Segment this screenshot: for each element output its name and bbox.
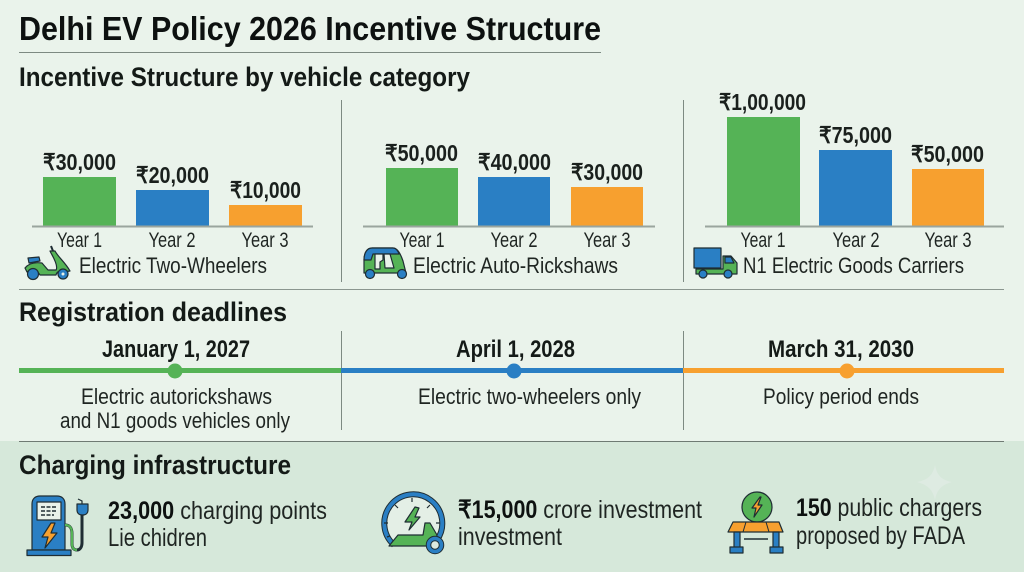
panel: n1 electric goods carriers — [694, 89, 1004, 278]
panel: electric auto-rickshaws — [363, 140, 655, 278]
deadline: january 2027: January 1, 2027 — [102, 336, 250, 363]
bar chart: goods carriers: ₹1,00,000 — [719, 89, 806, 115]
panel: electric two-wheelers — [25, 149, 313, 280]
category label: Electric Two-Wheelers — [79, 253, 267, 278]
bar chart: two-wheelers — [32, 149, 313, 252]
bar chart: goods carriers: Year 3 — [924, 229, 972, 252]
bar chart: two-wheelers: ₹30,000 — [43, 149, 116, 175]
heading: registration deadlines: Registration deadlines — [19, 297, 287, 327]
bar chart: auto-rickshaws: ₹40,000 — [478, 149, 551, 175]
icon: auto-rickshaw — [364, 248, 406, 278]
stat: charging points: Lie chidren — [108, 524, 207, 552]
deadline: april 2028 — [418, 336, 641, 409]
bar chart: goods carriers: Year 1 — [740, 229, 786, 252]
bar chart: auto-rickshaws: Year 2 — [490, 229, 538, 252]
category label: N1 Electric Goods Carriers — [743, 253, 964, 278]
deadline: april 2028: April 1, 2028 — [456, 336, 575, 363]
bar chart: two-wheelers: Year 2 — [148, 229, 196, 252]
stat: charging points — [108, 497, 327, 552]
stat: investment: ₹15,000 crore investment — [458, 496, 702, 524]
stat: investment — [458, 496, 702, 551]
bar chart: auto-rickshaws: Year 1 — [400, 229, 444, 252]
bar chart: two-wheelers: ₹10,000 — [230, 177, 301, 203]
bar chart: goods carriers: ₹75,000 — [819, 122, 892, 148]
stat: charging points: 23,000 charging points — [108, 497, 327, 525]
icon: charging pump — [27, 496, 88, 556]
bar chart: two-wheelers: Year 1 — [57, 229, 102, 252]
deadline: march 2030: Policy period ends — [763, 384, 919, 409]
icon: scooter — [25, 246, 70, 280]
icon: solar charger — [728, 492, 783, 553]
icon: investment gauge — [384, 494, 442, 552]
bar chart: two-wheelers: ₹20,000 — [136, 162, 209, 188]
bar chart: goods carriers: Year 2 — [832, 229, 880, 252]
deadline: march 2030: March 31, 2030 — [768, 336, 914, 363]
heading: incentive structure: Incentive Structure by vehicle category — [19, 62, 470, 92]
category label: Electric Auto-Rickshaws — [413, 253, 618, 278]
bar chart: auto-rickshaws: Year 3 — [584, 229, 630, 252]
deadline: january 2027 — [60, 336, 290, 433]
timeline: registration deadlines — [19, 331, 1004, 433]
stat: public chargers: proposed by FADA — [796, 522, 965, 550]
bar chart: auto-rickshaws: ₹50,000 — [385, 140, 458, 166]
bar chart: two-wheelers: Year 3 — [242, 229, 288, 252]
deadline: january 2027: Electric autorickshaws — [81, 384, 272, 409]
icon: truck — [694, 248, 737, 278]
stat: public chargers — [796, 494, 982, 550]
bar chart: auto-rickshaws — [363, 140, 655, 252]
bar chart: auto-rickshaws: ₹30,000 — [571, 159, 643, 185]
bar chart: goods carriers — [705, 89, 1004, 252]
stat: investment: investment — [458, 523, 562, 551]
heading: charging infrastructure: Charging infrastructure — [19, 450, 291, 480]
bar chart: goods carriers: ₹50,000 — [911, 141, 984, 167]
deadline: march 2030 — [763, 336, 919, 409]
stat: public chargers: 150 public chargers — [796, 494, 982, 522]
title: Delhi EV Policy 2026 Incentive Structure — [19, 10, 601, 47]
deadline: january 2027: and N1 goods vehicles only — [60, 408, 290, 433]
deadline: april 2028: Electric two-wheelers only — [418, 384, 641, 409]
